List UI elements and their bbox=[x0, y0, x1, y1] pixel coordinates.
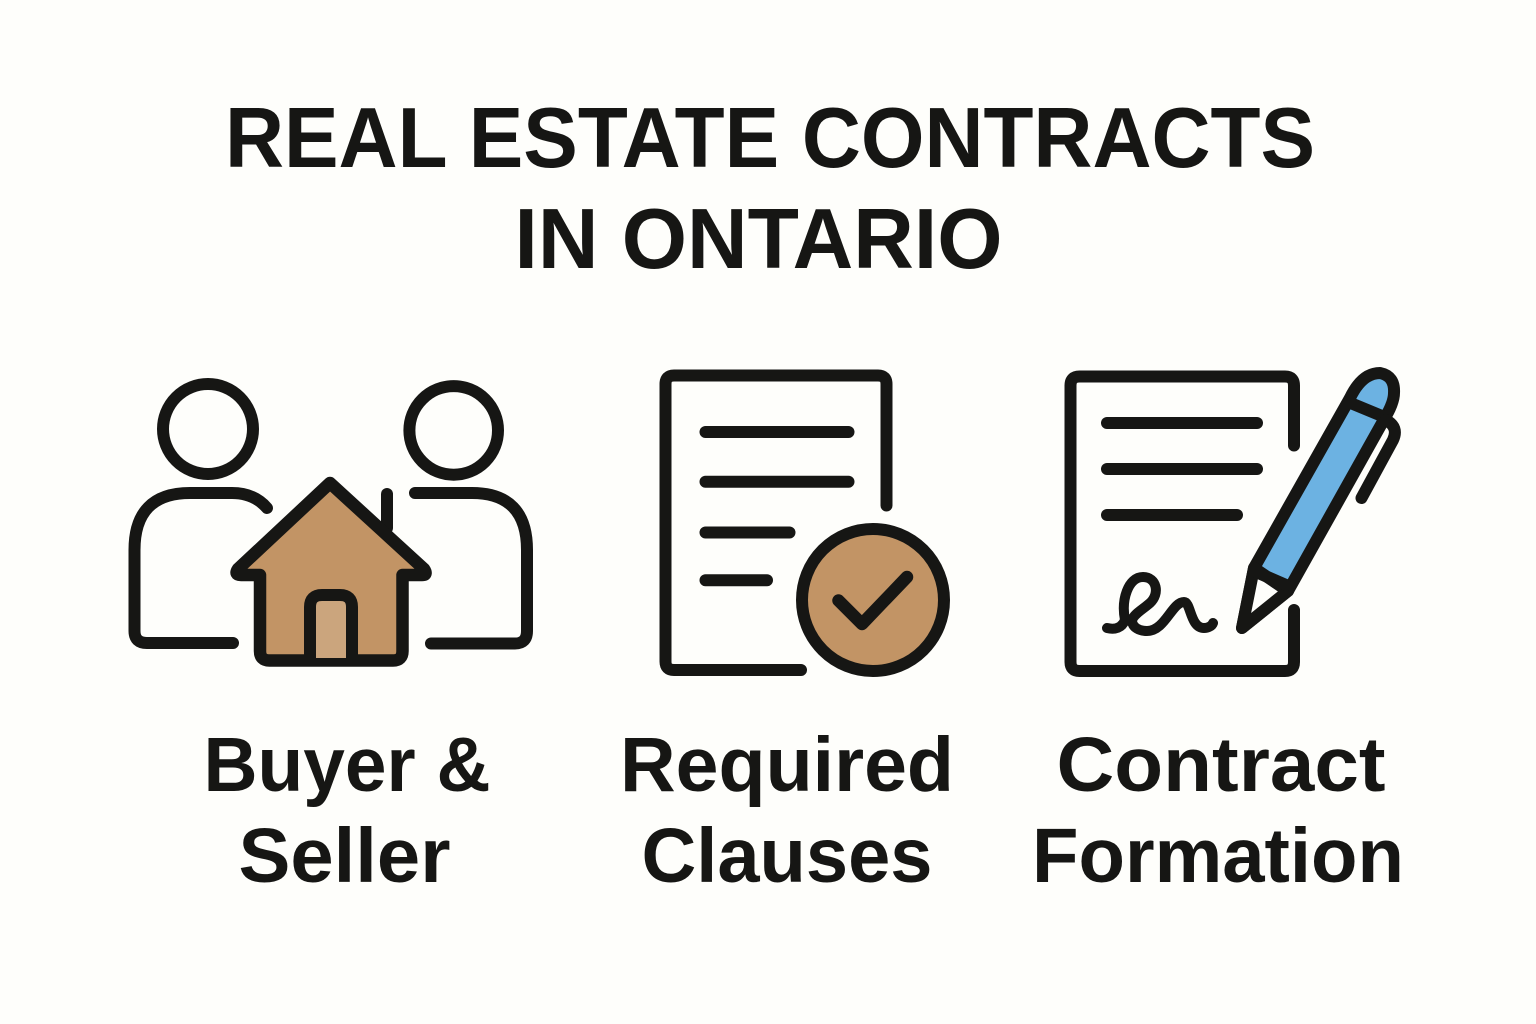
signature bbox=[1107, 577, 1213, 631]
title bbox=[225, 91, 1315, 287]
pen bbox=[1242, 373, 1395, 628]
title: IN ONTARIO bbox=[514, 192, 1002, 287]
icon: buyer and seller with house bbox=[134, 384, 527, 660]
label: buyer and seller: Buyer & bbox=[204, 722, 490, 808]
label: contract formation: Formation bbox=[1032, 813, 1404, 899]
label: contract formation: Contract bbox=[1056, 722, 1386, 808]
label: contract formation bbox=[1032, 722, 1404, 899]
title: REAL ESTATE CONTRACTS bbox=[225, 91, 1315, 186]
icon: signed contract with pen bbox=[1070, 373, 1395, 671]
label: required clauses: Required bbox=[620, 722, 954, 808]
label: required clauses bbox=[620, 722, 954, 899]
label: required clauses: Clauses bbox=[642, 813, 932, 899]
label: buyer and seller: Seller bbox=[238, 813, 450, 899]
icon: document with check badge bbox=[666, 376, 944, 671]
label: buyer and seller bbox=[204, 722, 490, 899]
